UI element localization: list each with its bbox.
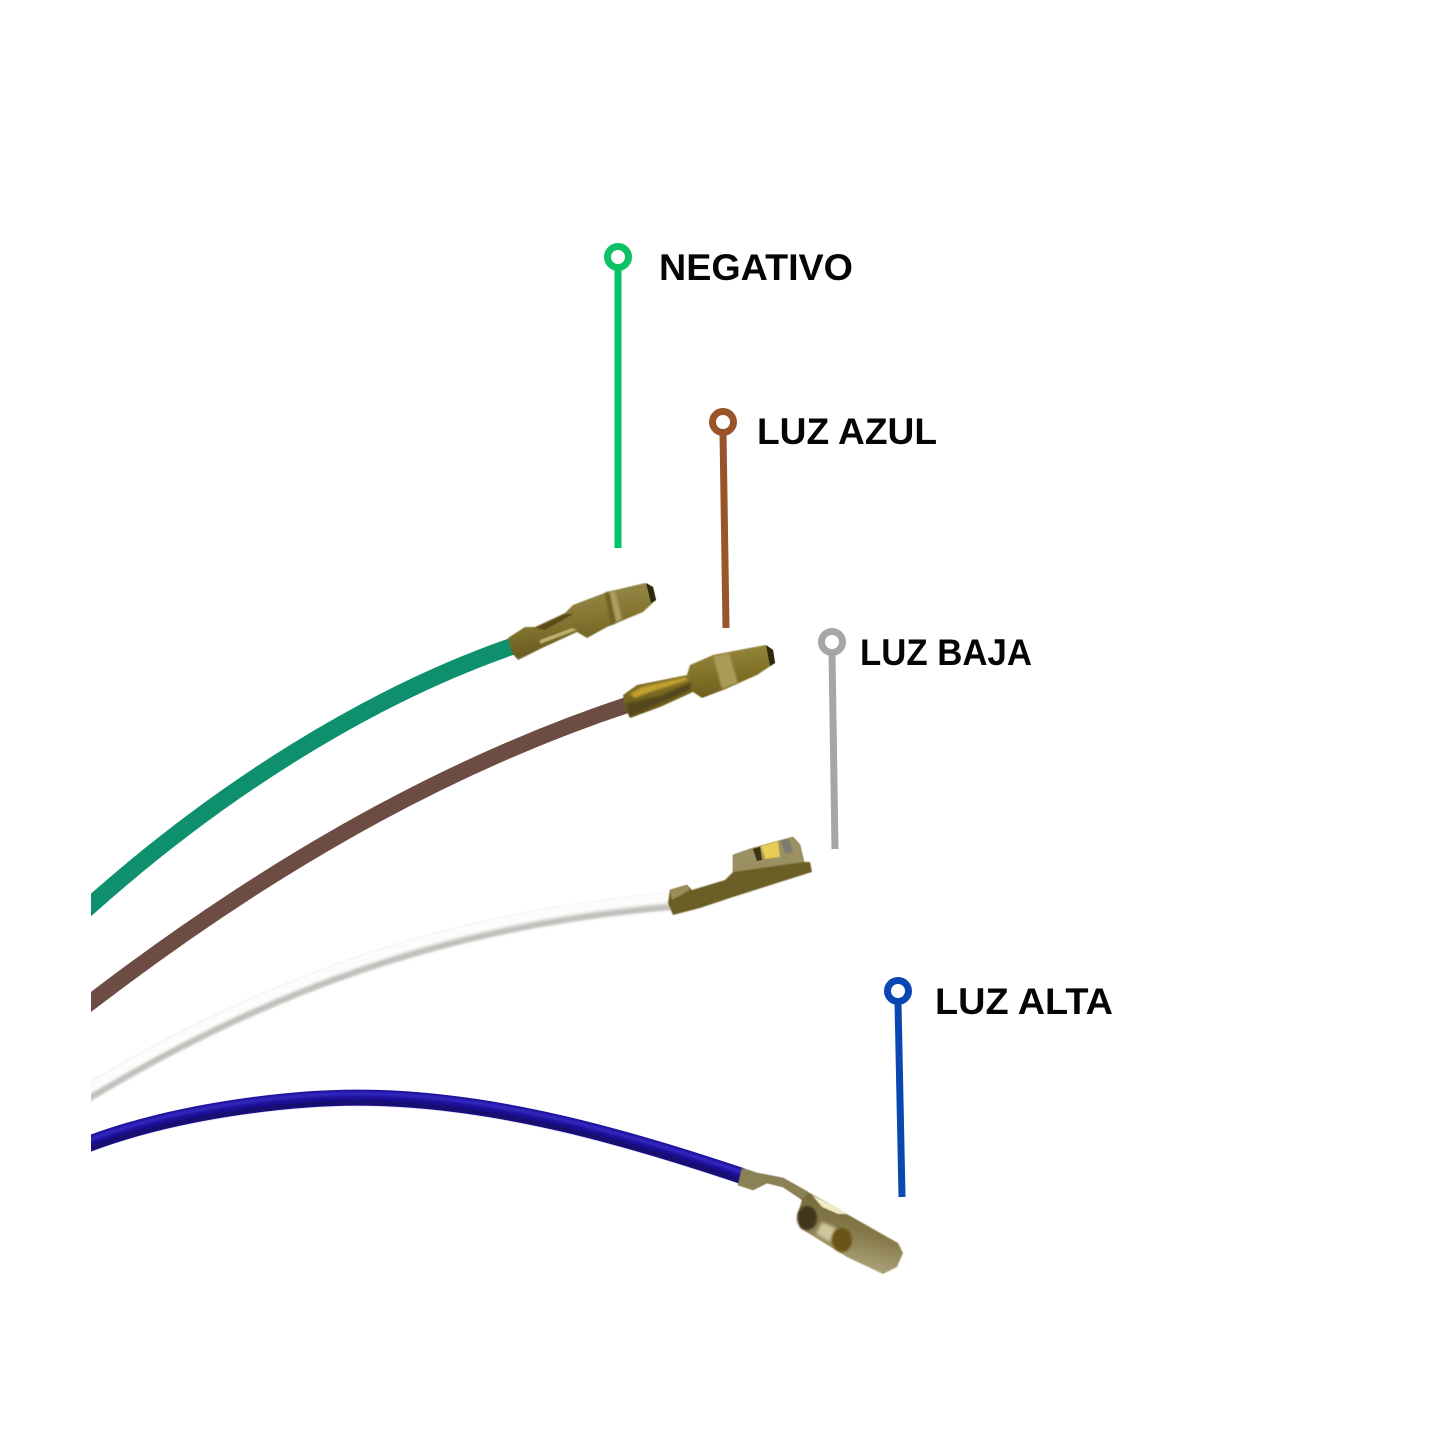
wire: white bbox=[68, 897, 672, 1110]
wire: blue bbox=[70, 1094, 742, 1181]
wire: brown bbox=[68, 704, 630, 1019]
callout: LUZ ALTA: LUZ ALTA bbox=[935, 981, 1113, 1022]
callout: LUZ BAJA bbox=[822, 632, 1032, 849]
callout: LUZ BAJA: LUZ BAJA bbox=[860, 632, 1032, 673]
connector: green wire terminal bbox=[508, 583, 656, 660]
callout: LUZ ALTA bbox=[888, 980, 1113, 1197]
callout: NEGATIVO bbox=[608, 246, 853, 548]
connector: brown wire terminal bbox=[623, 645, 775, 718]
callout: LUZ AZUL: LUZ AZUL bbox=[757, 411, 937, 452]
connector: blue wire terminal bbox=[738, 1168, 903, 1274]
wire: green bbox=[68, 645, 516, 925]
callout: LUZ AZUL bbox=[712, 411, 937, 628]
callout: NEGATIVO: NEGATIVO bbox=[659, 247, 853, 288]
connector: white wire terminal bbox=[668, 837, 812, 915]
